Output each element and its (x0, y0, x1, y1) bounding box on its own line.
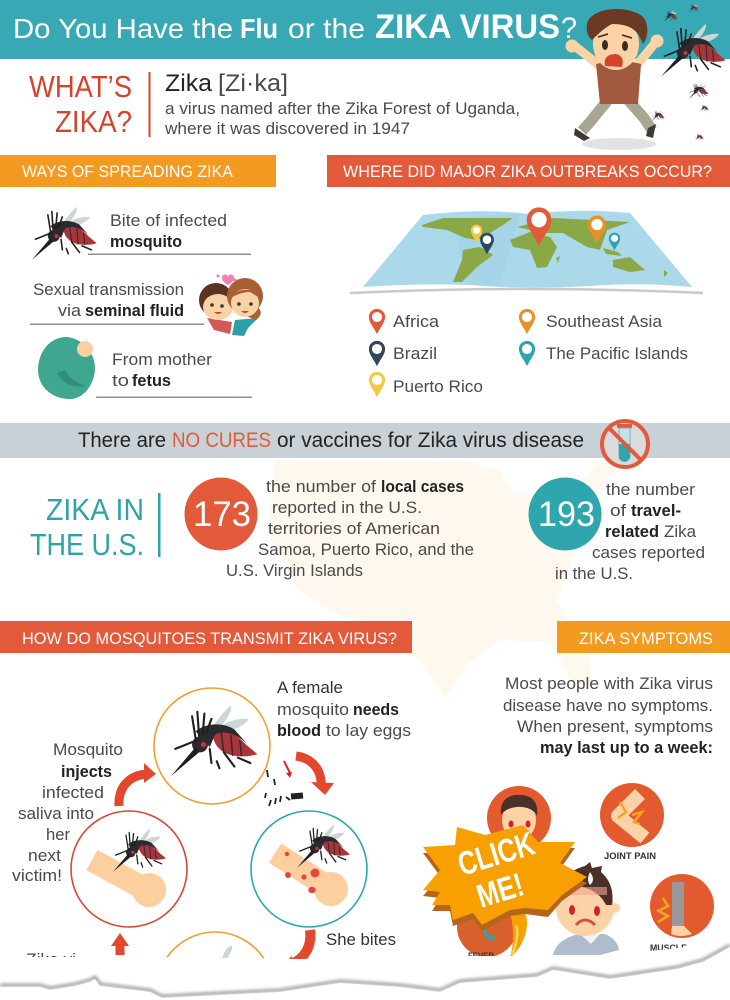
title banner: ? (561, 12, 577, 45)
stat: 173 local cases: local cases (381, 478, 464, 496)
panel: how mosquitoes transmit zika (0, 621, 412, 1000)
stat: 193 travel-related cases: travel- (631, 502, 681, 520)
text: symptoms intro: When present, symptoms (517, 718, 713, 736)
stat: 173 local cases (184, 478, 474, 580)
text: mosquito injects: next (28, 847, 61, 865)
stat: 173 local cases: territories of American (268, 520, 440, 538)
icon: crossed out test tube (602, 421, 648, 467)
heading: zika symptoms: ZIKA SYMPTOMS (579, 629, 713, 648)
background map of the USA (268, 459, 613, 697)
icon: fever partially hidden (457, 897, 517, 961)
heading: zika symptoms (557, 621, 730, 653)
text: bite of infected mosquito: mosquito (110, 233, 182, 251)
text: she bites: She bites (326, 931, 396, 949)
text: sexual transmission: seminal fluid (85, 302, 184, 320)
text: symptoms intro: disease have no symptoms. (503, 697, 713, 715)
arrow: top to right (296, 756, 334, 795)
icon: joint pain: JOINT PAIN (604, 851, 656, 861)
text block: zika definition (164, 70, 520, 138)
arrow: bottom to left (111, 933, 129, 955)
stat: 173 local cases: U.S. Virgin Islands (226, 562, 363, 580)
text: a female mosquito needs blood: mosquito (277, 701, 349, 719)
callout: click me starburst: CLICK (453, 824, 539, 883)
text: a female mosquito needs blood: needs (353, 701, 399, 719)
arrow: left to top (119, 763, 156, 806)
text: a female mosquito needs blood: to lay eggs (326, 722, 411, 740)
icon: muscle pain (650, 874, 714, 953)
icon: falling mosquito debris (265, 761, 303, 806)
text block: zika definition: a virus named after the Zika Forest of Uganda, (165, 99, 520, 118)
heading: zika in the u.s. (30, 492, 160, 562)
legend: outbreak locations: Brazil (393, 344, 437, 363)
text: mosquito injects: her (46, 826, 70, 844)
panel: ways of spreading zika (0, 155, 276, 399)
cycle step: mosquito needs blood (154, 688, 270, 804)
stat: 193 travel-related cases: the number (606, 481, 696, 499)
icon: joint pain (600, 783, 664, 861)
callout: click me starburst: ME! (472, 866, 528, 915)
heading: major outbreaks (327, 155, 730, 187)
heading: how do mosquitoes transmit: HOW DO MOSQUITOES TRANSMIT ZIKA VIRUS? (22, 629, 397, 648)
heading: what's zika: ZIKA? (55, 104, 132, 139)
title banner (0, 0, 730, 59)
stat: 173 local cases: the number of (266, 478, 376, 496)
text: mosquito injects (12, 741, 123, 885)
cycle step: mosquito injects saliva (71, 811, 187, 927)
title banner: ZIKA VIRUS (375, 8, 560, 46)
torn paper edge (0, 938, 730, 1000)
stat: 193 travel-related cases: 193 (538, 495, 595, 534)
stat: 173 local cases: reported in the U.S. (272, 499, 422, 517)
arrow: right to bottom (278, 930, 310, 976)
text: mosquito injects: infected (42, 784, 104, 802)
heading: ways of spreading (0, 155, 276, 187)
stat: 193 travel-related cases: of (610, 502, 626, 520)
text: a female mosquito needs blood: A female (277, 679, 343, 697)
text: from mother to fetus: to (112, 372, 129, 390)
stat: 193 travel-related cases: cases reported (592, 544, 705, 562)
heading: how do mosquitoes transmit (0, 621, 412, 653)
text block: zika definition: Zika (165, 70, 213, 97)
icon: frightened man running (566, 9, 664, 150)
text: symptoms intro: Most people with Zika virus (505, 675, 713, 693)
text: mosquito injects: victim! (12, 867, 62, 885)
heading: what's zika: WHAT’S (29, 69, 132, 104)
heading: ways of spreading: WAYS OF SPREADING ZIKA (22, 162, 234, 181)
legend: outbreak locations: Southeast Asia (546, 312, 663, 331)
title banner: Flu (240, 13, 278, 44)
icon: couple with heart (199, 274, 263, 336)
title banner: Do You Have the (13, 13, 233, 44)
stat: 193 travel-related cases (528, 478, 705, 583)
text block: zika definition: [Zi·ka] (218, 70, 288, 97)
text: from mother to fetus: fetus (132, 372, 171, 390)
callout: no cures band: or vaccines for Zika virus disease (277, 429, 584, 452)
heading: major outbreaks: WHERE DID MAJOR ZIKA OUTBREAKS OCCUR? (343, 162, 712, 181)
panel: zika symptoms (457, 621, 730, 961)
icon: small mosquitoes swarm (652, 4, 709, 141)
stat: 193 travel-related cases: related (605, 523, 659, 541)
text: zika virus cut off: Zika vi (26, 951, 76, 969)
heading: zika in the u.s.: THE U.S. (30, 527, 144, 562)
heading: zika in the u.s.: ZIKA IN (46, 492, 144, 527)
icon: red eyes symptom (487, 786, 551, 850)
stat: 193 travel-related cases: Zika (664, 523, 697, 541)
text: mosquito injects: Mosquito (53, 741, 123, 759)
text: bite of infected mosquito (88, 212, 251, 255)
legend: outbreak locations: Africa (393, 312, 440, 331)
legend: outbreak locations: Puerto Rico (393, 377, 483, 396)
world map (350, 207, 703, 293)
text: mosquito injects: saliva into (18, 805, 94, 823)
legend: outbreak locations (369, 309, 688, 397)
cycle step: bite on infected person (251, 811, 367, 927)
text: sexual transmission (30, 281, 204, 325)
callout: no cures band: There are (78, 429, 166, 452)
legend: outbreak locations: The Pacific Islands (546, 344, 688, 363)
icon: mosquito bite (32, 207, 97, 260)
text: mosquito injects: injects (61, 763, 112, 781)
cycle step: bottom partially cut (157, 932, 273, 1000)
callout: no cures band (0, 423, 730, 458)
text: sexual transmission: Sexual transmission (33, 281, 184, 299)
icon: large mosquito chasing (661, 24, 726, 77)
text: second line cut off: a person (326, 955, 390, 973)
text: a female mosquito needs blood (277, 679, 411, 740)
text: bite of infected mosquito: Bite of infected (110, 212, 227, 230)
heading: what's zika (29, 69, 150, 139)
stat: 173 local cases: Samoa, Puerto Rico, and the (258, 541, 474, 559)
icon: fever partially hidden: FEVER (468, 951, 494, 961)
text: sexual transmission: via (58, 302, 82, 320)
callout: no cures band: NO CURES (172, 429, 271, 452)
icon: sick man (553, 862, 620, 955)
callout: click me starburst (423, 824, 587, 958)
text block: zika definition: where it was discovered in 1947 (164, 119, 410, 138)
text: from mother to fetus (96, 351, 252, 398)
stat: 173 local cases: 173 (193, 495, 251, 534)
text: a female mosquito needs blood: blood (277, 722, 321, 740)
panel: where did outbreaks occur (327, 155, 730, 397)
icon: muscle pain: MUSCLE (650, 943, 687, 953)
text: symptoms intro: may last up to a week: (540, 739, 713, 757)
text: from mother to fetus: From mother (112, 351, 213, 369)
title banner: or the (288, 13, 365, 44)
icon: pregnant mother (38, 337, 95, 399)
stat: 193 travel-related cases: in the U.S. (555, 565, 633, 583)
text: symptoms intro (503, 675, 713, 757)
